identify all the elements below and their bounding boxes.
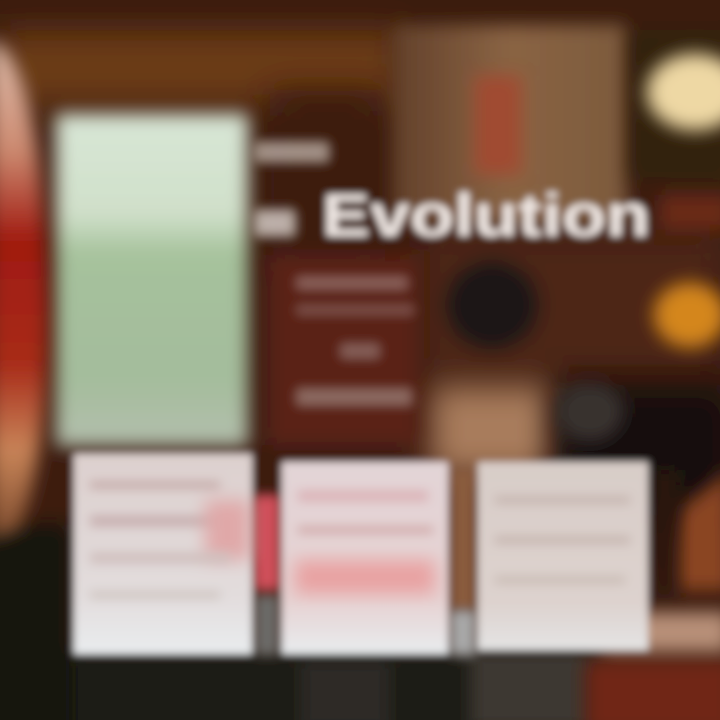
panel: card 2 <box>282 462 448 654</box>
title <box>255 142 650 249</box>
window: green foliage <box>56 114 248 446</box>
panel: card 3 <box>478 462 648 650</box>
figure: left face <box>0 40 47 540</box>
panel: dark red text panel <box>268 255 418 445</box>
red accent bar between cards <box>254 495 280 590</box>
panel: card 1 <box>74 454 252 654</box>
wall ornament: red hanging <box>474 75 522 175</box>
glow: orange lamp <box>654 283 720 347</box>
title: Evolution <box>322 182 650 249</box>
lamp: upper right <box>630 30 720 230</box>
figure: seated person <box>446 261 624 442</box>
